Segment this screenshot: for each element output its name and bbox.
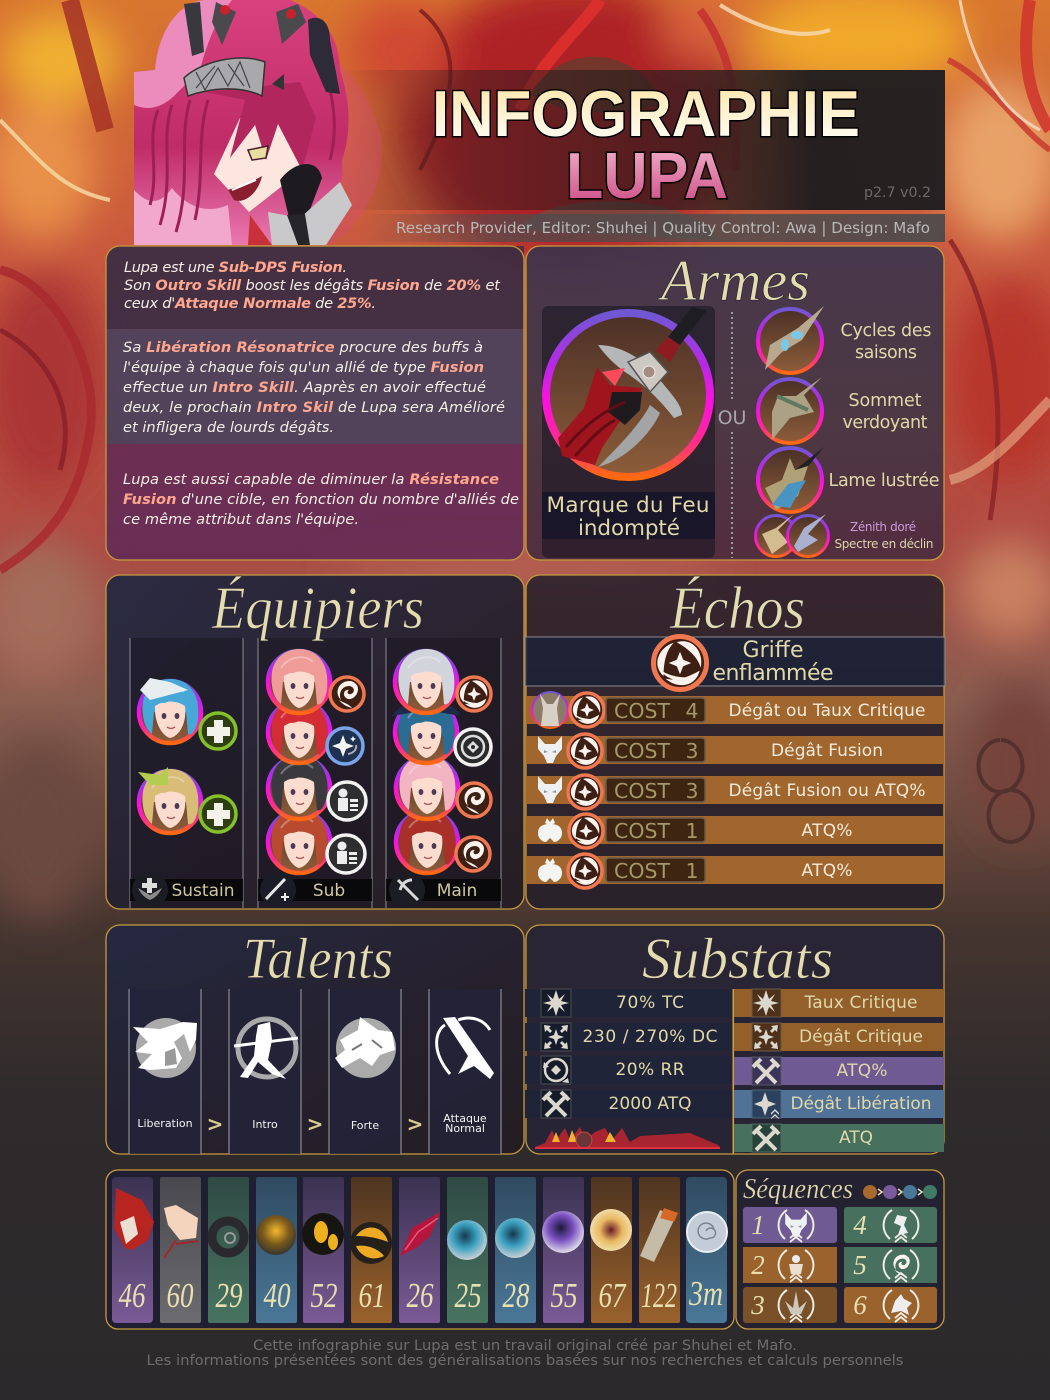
panel: description (106, 246, 524, 560)
column: sub dps (258, 638, 372, 908)
footer note: Les informations présentées sont des généralisations basées sur nos recherches et calculs personnels (146, 1353, 904, 1369)
talent: Forte (329, 989, 401, 1154)
weapon name: Lame lustrée: Lame lustrée (828, 471, 940, 491)
column: sustain (130, 638, 243, 908)
talent: Attaque Normal: Normal (445, 1122, 485, 1135)
priority stats column (734, 989, 944, 1152)
sequence 1 (743, 1207, 837, 1243)
alternate weapon names: Zénith doré (850, 520, 916, 534)
footer note (146, 1338, 904, 1369)
role label: Main: Main (437, 881, 477, 901)
title banner background (340, 70, 945, 210)
set name: Griffe (742, 638, 804, 663)
talent: Liberation (129, 989, 201, 1154)
weapon name: Sommet verdoyant (842, 391, 928, 433)
material: 3m: 3m (688, 1274, 723, 1313)
material: 26 (399, 1177, 440, 1323)
material: 25 (447, 1177, 488, 1323)
material: 52 (302, 1177, 344, 1323)
icon: set fusion (651, 636, 706, 692)
role label: Sustain (130, 872, 243, 908)
material: 26: 26 (406, 1276, 434, 1315)
row: cost 1 b (526, 854, 944, 889)
stat: 70% TC (525, 989, 732, 1017)
material: 29 (208, 1177, 249, 1323)
set name: enflammée (712, 661, 834, 686)
text: role summary: ceux d'Attaque Normale de 25%. (124, 295, 376, 312)
weapon name: Cycles des saisons (840, 321, 932, 363)
material: 60 (160, 1177, 201, 1323)
text: resistance reduction (123, 471, 519, 528)
title: INFOGRAPHIE (432, 77, 860, 150)
sequence 2 (743, 1247, 837, 1283)
weapon: Cycles des saisons (758, 306, 824, 373)
footer note: Cette infographie sur Lupa est un travail original créé par Shuhei et Mafo. (253, 1338, 797, 1354)
talent: Intro: Intro (252, 1118, 278, 1131)
material: 122: 122 (641, 1276, 677, 1315)
text: resonance liberation: effectue un Intro Skill. Aaprès en avoir effectué (123, 379, 486, 396)
priority: ATQ%: ATQ% (836, 1061, 888, 1081)
weapon: Lame lustrée (758, 447, 824, 512)
priority: Taux Critique: Taux Critique (804, 993, 918, 1013)
version label: p2.7 v0.2 (864, 185, 931, 201)
heading: Armes: Armes (657, 248, 810, 313)
row: cost 3 fusion or attack: Dégât Fusion ou ATQ% (728, 781, 926, 801)
priority: Dégât Critique: Dégât Critique (799, 1027, 923, 1047)
text: role summary: Son Outro Skill boost les dégâts Fusion de 20% et (124, 277, 501, 294)
target stats column (525, 989, 732, 1149)
sequence 2: 2 (751, 1250, 765, 1280)
heading: Talents: Talents (243, 926, 393, 991)
alternate weapon names (834, 520, 934, 551)
weapon name: Cycles des saisons: saisons (855, 343, 917, 363)
decoration: flame banner (535, 1127, 720, 1149)
row: cost 3 fusion: Dégât Fusion (771, 741, 883, 761)
material: 61 (350, 1177, 392, 1323)
material: 46 (112, 1177, 154, 1323)
role label: Main (386, 872, 501, 908)
weapon name: Marque du Feu (546, 493, 710, 518)
row: cost 3 fusion or attack: COST (614, 779, 670, 803)
stat: 2000 ATQ: 2000 ATQ (608, 1094, 692, 1114)
row: cost 1 a: 1 (685, 819, 699, 843)
material: 3m (686, 1177, 727, 1323)
sequence 6: 6 (853, 1290, 867, 1320)
talent: Forte: Forte (351, 1119, 379, 1132)
character: main 2 (392, 699, 491, 765)
talent: Attaque Normal: Attaque (443, 1112, 487, 1125)
stat: 230 / 270% DC (525, 1023, 732, 1051)
main weapon box (542, 306, 715, 558)
row: cost 4 (526, 692, 944, 728)
sequence 4 (844, 1207, 937, 1243)
text: resistance reduction: ce même attribut dans l'équipe. (123, 511, 359, 528)
priority: ATQ% (734, 1057, 944, 1085)
weapon name: Sommet verdoyant: verdoyant (842, 413, 928, 433)
stat: 2000 ATQ (525, 1090, 732, 1118)
text: resistance reduction: Fusion d'une cible, en fonction du nombre d'alliés de (123, 491, 519, 508)
alternate weapon names: Spectre en déclin (834, 537, 934, 551)
weapon name: indompté (578, 516, 680, 541)
stat: 70% TC: 70% TC (616, 993, 684, 1013)
text: role summary: Lupa est une Sub-DPS Fusion. (124, 259, 347, 276)
column: main dps (386, 638, 501, 908)
material: 40: 40 (264, 1276, 291, 1315)
row: cost 4: COST (614, 699, 670, 723)
stat: 230 / 270% DC: 230 / 270% DC (582, 1027, 718, 1047)
character: main 3 (396, 755, 491, 819)
weapon art: Marque du Feu indompté (558, 307, 707, 467)
weapon name: Sommet verdoyant: Sommet (848, 391, 922, 411)
panel: sequences (736, 1170, 944, 1329)
character: sub 4 (268, 809, 365, 873)
panel: talents (106, 925, 524, 1154)
stat: 20% RR: 20% RR (616, 1060, 685, 1080)
text: resonance liberation: l'équipe à chaque fois qu'un allié de type Fusion (123, 359, 484, 376)
panel: materials (106, 1170, 734, 1329)
material: 55 (542, 1177, 584, 1323)
set name (712, 638, 834, 686)
row: cost 1 a (526, 814, 944, 849)
priority: Dégât Libération (734, 1090, 944, 1119)
heading: Équipiers: Équipiers (211, 575, 424, 641)
material: 67: 67 (598, 1276, 627, 1315)
title (432, 77, 860, 212)
talent: Liberation: Liberation (137, 1117, 193, 1130)
weapon name: Cycles des saisons: Cycles des (840, 321, 932, 341)
character: main 4 (396, 809, 490, 873)
sequence 5 (844, 1247, 937, 1283)
text: resonance liberation (123, 339, 505, 436)
row: cost 1 a: COST (614, 819, 670, 843)
priority: Dégât Libération: Dégât Libération (790, 1094, 932, 1114)
material: 46: 46 (118, 1276, 146, 1315)
weapon: Sommet verdoyant (758, 377, 822, 443)
material: 25: 25 (454, 1276, 482, 1315)
talent: Intro (229, 989, 301, 1154)
row: cost 3 fusion or attack: 3 (685, 779, 699, 803)
priority: ATQ (734, 1124, 944, 1152)
text: resonance liberation: Sa Libération Résonatrice procure des buffs à (123, 339, 483, 356)
heading: Séquences: Séquences (743, 1174, 853, 1205)
heading: Substats: Substats (642, 926, 833, 991)
credits: Research Provider, Editor: Shuhei | Quality Control: Awa | Design: Mafo (396, 219, 930, 237)
priority: Dégât Critique (734, 1023, 944, 1051)
text: resonance liberation: deux, le prochain Intro Skil de Lupa sera Amélioré (123, 399, 505, 416)
panel: team (106, 575, 524, 909)
credit band background (360, 214, 945, 242)
sequence 3: 3 (750, 1290, 765, 1320)
weapon name (546, 493, 710, 541)
character: sub 1 (268, 649, 364, 713)
title: LUPA (566, 139, 728, 212)
priority: Taux Critique (734, 989, 944, 1017)
row: cost 1 a: ATQ% (802, 821, 852, 841)
row: cost 1 b: ATQ% (802, 861, 852, 881)
stat: 20% RR (525, 1056, 732, 1084)
row: cost 4: 4 (685, 699, 699, 723)
panel: substats (525, 925, 944, 1154)
arrow: > (307, 1112, 323, 1136)
material: 60: 60 (166, 1276, 194, 1315)
sequence 4: 4 (853, 1210, 867, 1240)
row: cost 4: Dégât ou Taux Critique (728, 701, 926, 721)
sequence 3 (743, 1287, 837, 1323)
role label: Sub: Sub (313, 881, 345, 901)
heading: Échos: Échos (669, 575, 805, 641)
material: 40 (256, 1177, 297, 1323)
character: sub 2 (268, 699, 363, 764)
weapon ring (546, 313, 710, 477)
material: 28 (495, 1177, 536, 1323)
character: main 1 (395, 649, 491, 713)
priority dots (863, 1185, 937, 1199)
character: sub 3 (268, 755, 366, 820)
role label: Sub (258, 872, 372, 908)
panel: weapons (526, 246, 944, 560)
text: resistance reduction: Lupa est aussi capable de diminuer la Résistance (123, 471, 499, 488)
weapon: Zénith doré (756, 514, 796, 556)
character: sustain 1 (139, 678, 236, 749)
material: 28: 28 (502, 1276, 530, 1315)
row: cost 3 fusion (526, 734, 944, 769)
material: 52: 52 (310, 1276, 338, 1315)
weapon: Spectre en déclin (788, 514, 828, 556)
row: cost 1 b: COST (614, 859, 670, 883)
material: 55: 55 (550, 1276, 578, 1315)
arrow: > (207, 1112, 223, 1136)
panel: echoes (525, 575, 945, 909)
talent: Attaque Normal (429, 989, 501, 1154)
material: 122 (639, 1177, 680, 1323)
echo set band (525, 636, 945, 692)
text: resonance liberation: et infligera de lourds dégâts. (123, 419, 334, 436)
material: 29: 29 (216, 1276, 242, 1315)
label: OU: OU (718, 407, 746, 429)
material: 67 (590, 1177, 632, 1323)
sequence 6 (844, 1287, 937, 1323)
illustration: Lupa character portrait (134, 0, 382, 245)
row: cost 1 b: 1 (685, 859, 699, 883)
row: cost 3 fusion: COST (614, 739, 670, 763)
role label: Sustain: Sustain (171, 881, 235, 901)
row: cost 3 fusion: 3 (685, 739, 699, 763)
priority: ATQ: ATQ (839, 1128, 873, 1148)
text: role summary (124, 259, 501, 312)
sequence 5: 5 (853, 1250, 867, 1280)
sequence 1: 1 (751, 1210, 765, 1240)
arrow: > (407, 1112, 423, 1136)
row: cost 3 fusion or attack (526, 775, 944, 810)
character: sustain 2 (138, 767, 236, 833)
material: 61: 61 (358, 1276, 386, 1315)
weapon name strip (542, 492, 715, 539)
